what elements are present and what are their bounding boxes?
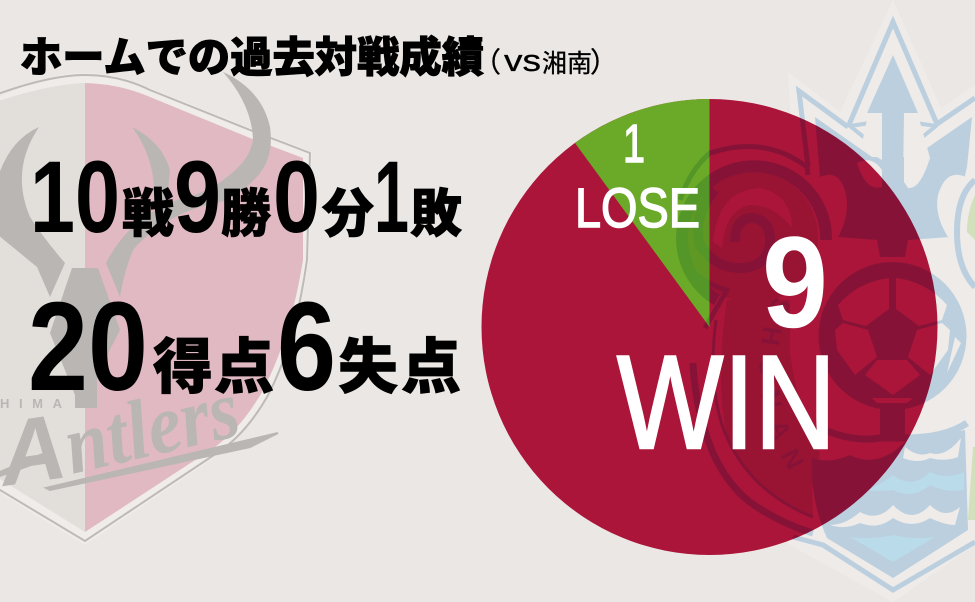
heading: ホームでの過去対戦成績 [20, 34, 484, 81]
icon: Shonan Bellmare crest halo [675, 0, 975, 602]
heading suffix: vs Shonan [473, 43, 618, 78]
heading suffix: vs Shonan: 湘南 [542, 50, 592, 78]
Shonan band with lettering [690, 298, 820, 536]
goals: 20 scored 6 conceded: 点 [401, 334, 461, 401]
icon: Kashima Antlers crest watermark: HIMA [0, 396, 63, 411]
pie label: 1 lose: LOSE [575, 176, 700, 239]
goals: 20 scored 6 conceded [28, 276, 461, 417]
record: 10 games 9 wins 0 draws 1 loss: 敗 [410, 186, 462, 244]
water waves shield [793, 423, 975, 590]
goals: 20 scored 6 conceded: 失 [338, 334, 398, 401]
goals: 20 scored 6 conceded: 6 [277, 276, 336, 417]
record: 10 games 9 wins 0 draws 1 loss: 分 [322, 186, 374, 244]
goals: 20 scored 6 conceded: 得 [153, 334, 213, 401]
goals: 20 scored 6 conceded: 点 [214, 334, 274, 401]
pie chart: 9 wins and 1 loss [482, 99, 938, 555]
icon: Shonan Bellmare crest watermark [676, 16, 975, 593]
pie label: 9 win: 9 [762, 209, 828, 355]
record: 10 games 9 wins 0 draws 1 loss: 1 [374, 140, 409, 254]
icon: Kashima Antlers crest watermark: ntlers [55, 362, 248, 493]
pie label: 1 lose: 1 [623, 114, 645, 174]
record: 10 games 9 wins 0 draws 1 loss: 9 [174, 140, 221, 254]
spiral emblem [680, 147, 826, 328]
soccer ball [818, 262, 966, 437]
icon: Kashima Antlers crest watermark [0, 72, 312, 545]
record: 10 games 9 wins 0 draws 1 loss: 10 [30, 140, 120, 254]
heading suffix: vs Shonan: vs [504, 43, 541, 78]
pie label: 9 win [617, 209, 836, 477]
pie label: 1 lose [575, 114, 700, 239]
record: 10 games 9 wins 0 draws 1 loss: 0 [273, 140, 320, 254]
record: 10 games 9 wins 0 draws 1 loss [30, 140, 462, 254]
goals: 20 scored 6 conceded: 20 [28, 276, 148, 417]
Shonan band with lettering: SHONAN [760, 298, 804, 470]
pie label: 9 win: WIN [617, 329, 836, 477]
heading suffix: vs Shonan: （ [473, 47, 501, 78]
record: 10 games 9 wins 0 draws 1 loss: 勝 [221, 186, 271, 244]
heading suffix: vs Shonan: ） [590, 47, 618, 78]
record: 10 games 9 wins 0 draws 1 loss: 戦 [122, 186, 174, 244]
